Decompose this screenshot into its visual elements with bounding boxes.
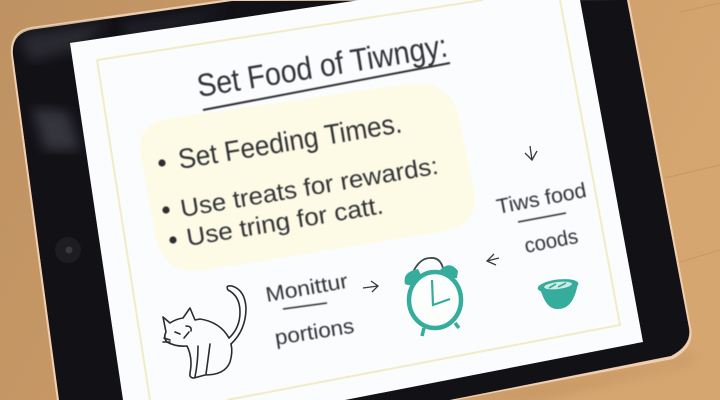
title: Set Food of Tiwngy: [194,27,450,104]
arrow: left [487,254,499,265]
bullet list [158,107,440,252]
label: Monittur / portions: portions [273,315,356,350]
title underline [203,63,450,110]
label: Monittur / portions: Monittur [264,270,350,307]
bullet 1: Set Feeding Times. [176,107,404,175]
label: Tiws food / coods: coods [523,225,580,258]
icon: alarm clock [405,258,461,336]
label: Tiws food / coods: Tiws food [495,179,588,219]
bullet 2: Use treats for rewards: [178,153,440,223]
icon: cat [163,286,246,378]
icon: bowl [537,277,579,309]
arrow: right [363,281,378,292]
label: Tiws food / coods [495,179,588,258]
cream bullet panel [140,83,475,271]
screen inner yellow frame [97,0,620,400]
camera / home button [55,237,81,263]
bullet 3: Use tring for catt. [185,192,385,252]
screen [70,0,643,400]
label: Monittur / portions [264,270,356,350]
arrow: down [525,146,537,160]
